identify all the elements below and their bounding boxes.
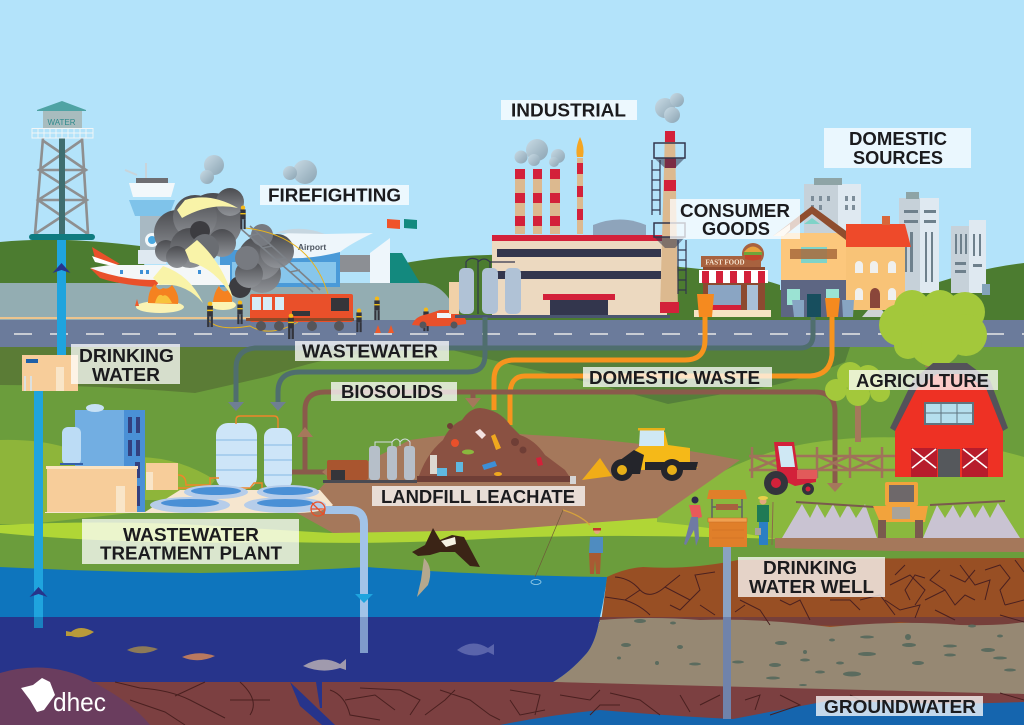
tower central pipe [59, 138, 65, 234]
upper pipe arrow [52, 263, 70, 273]
deep water [0, 617, 600, 682]
label: drinking water [71, 344, 180, 385]
lime band [0, 518, 800, 543]
process pipes [466, 258, 515, 314]
well [707, 490, 747, 719]
well pipe [723, 547, 731, 719]
sky smoke puffs [200, 155, 317, 184]
burning plane [90, 247, 230, 287]
factory roof tank [593, 220, 646, 235]
big chimney [652, 131, 686, 313]
plant platform [45, 490, 333, 513]
upper blue pipe [57, 240, 66, 356]
shop awning [699, 270, 768, 283]
outfall valve [311, 502, 325, 516]
plant annex [146, 463, 178, 490]
wastewater pipe long [236, 317, 813, 405]
road dashes [14, 333, 1024, 335]
wastewater arrows [228, 402, 286, 411]
factory [449, 93, 686, 318]
bald eagle with fish [412, 528, 480, 597]
label: consumer goods: GOODS [702, 218, 770, 239]
groundwater [500, 700, 1024, 725]
fire truck [246, 294, 354, 331]
tower name: WATER [48, 118, 76, 127]
water jets [153, 197, 238, 303]
soil dark strip [598, 617, 1024, 626]
tower roof [37, 101, 86, 111]
bin domestic [825, 298, 840, 317]
rock pebbles [617, 619, 1016, 686]
wastewater pipe short [278, 317, 485, 405]
firefighters [207, 206, 429, 339]
lower pipe arrow [30, 587, 48, 597]
gate annex [390, 253, 420, 283]
farmer [755, 496, 773, 545]
lower blue pipe [30, 391, 48, 628]
deep bedrock [0, 682, 1024, 725]
label: drinking water: WATER [92, 364, 160, 385]
label: drinking water well: DRINKING [763, 557, 857, 578]
label: domestic sources: DOMESTIC [849, 128, 947, 149]
soil cracks [115, 560, 1024, 725]
tower base [29, 234, 95, 240]
label: drinking water well: WATER WELL [749, 576, 874, 597]
fast food shop [694, 243, 771, 317]
soil layer brown [600, 558, 1024, 630]
factory smoke [514, 93, 684, 167]
label: drinking water: DRINKING [79, 345, 174, 366]
light green field right [657, 437, 1024, 540]
tower railing [32, 128, 93, 138]
shop step [694, 310, 771, 317]
landfill debris [430, 423, 543, 476]
tan rock layer [553, 618, 1024, 693]
label: agriculture: AGRICULTURE [856, 370, 989, 391]
shop sign [701, 256, 761, 267]
orange process pipe [178, 416, 278, 488]
dark green slope centre [440, 347, 850, 404]
label: landfill leachate: LANDFILL LEACHATE [381, 486, 575, 507]
label: drinking water well [738, 557, 885, 597]
house left [773, 206, 853, 317]
fire truck ladder [240, 226, 320, 292]
mid green land [0, 347, 1024, 587]
water tower [29, 101, 95, 240]
plant tower [75, 410, 125, 470]
tower tank [43, 111, 82, 129]
airport sign: Airport [298, 242, 326, 252]
sprayer mounds [782, 503, 1020, 538]
well base [709, 518, 747, 547]
road [0, 320, 1024, 347]
lime patch left [0, 440, 140, 524]
label: domestic sources: SOURCES [853, 147, 943, 168]
dhec apple icon [21, 678, 55, 712]
dhec wordmark: dhec [53, 687, 106, 717]
lime patch behind plant [140, 457, 215, 500]
sprayer boom [796, 501, 1005, 507]
woman at well [684, 496, 702, 546]
landfill brown ground [297, 433, 740, 533]
label: industrial: INDUSTRIAL [511, 100, 626, 120]
terminal building [220, 219, 420, 287]
red car [412, 310, 466, 328]
factory body [492, 235, 667, 316]
landfill mound [417, 408, 573, 482]
label: groundwater: GROUNDWATER [824, 696, 976, 717]
tractor [764, 442, 817, 495]
drinking water box [22, 355, 78, 391]
outfall pipe [311, 502, 373, 653]
shop window [708, 285, 741, 306]
aquifer fissure [290, 682, 335, 725]
factory door [543, 294, 615, 300]
consumer waste pipe [494, 317, 705, 410]
wheel loader [570, 428, 698, 484]
smoke clouds [154, 188, 294, 298]
clarifiers [150, 485, 326, 513]
plant main building [47, 468, 137, 512]
terminal gate [370, 238, 390, 283]
tall city buildings [804, 178, 990, 295]
large tree [879, 290, 987, 367]
tan rock layer lower [553, 660, 1024, 694]
label: wastewater treatment plant: WASTEWATER [123, 524, 259, 545]
back hills [0, 240, 1024, 300]
fisherman [531, 510, 603, 584]
barn [890, 363, 1008, 477]
label: wastewater treatment plant [82, 519, 299, 564]
tan shed [449, 282, 459, 314]
traffic cones [135, 299, 394, 333]
label: domestic sources [824, 128, 971, 168]
domestic waste pipe [510, 317, 832, 425]
wastewater plant buildings [45, 404, 333, 513]
flags [387, 219, 400, 229]
runway edge line [0, 317, 255, 319]
outfall arrow [355, 594, 373, 603]
trash cans [792, 300, 854, 317]
label: wastewater: WASTEWATER [302, 340, 438, 362]
label: consumer goods: CONSUMER [680, 200, 790, 221]
biosolids pipe [292, 392, 835, 488]
fire hose [207, 228, 328, 331]
tower legs [35, 138, 88, 234]
fast food shop: FAST FOOD [705, 258, 745, 266]
biosolids arrows [297, 398, 843, 492]
small tree [825, 362, 890, 442]
process tanks [459, 268, 521, 314]
leachate treatment unit [323, 439, 417, 483]
factory curb [455, 315, 670, 318]
sprayer vehicle [873, 482, 928, 538]
plant small tank [62, 427, 81, 465]
well roof [707, 490, 747, 499]
sky [0, 0, 1024, 290]
bedrock band right [553, 682, 1024, 725]
brown field strip [775, 538, 1024, 552]
house right [846, 216, 911, 317]
water lake [0, 567, 607, 682]
fire flames [136, 284, 236, 313]
burger sign [742, 243, 764, 265]
airport tower [125, 163, 175, 264]
jet bridge [340, 255, 376, 272]
dhec logo [0, 668, 150, 725]
flare stack [576, 137, 584, 234]
bin consumer [697, 294, 714, 317]
label: consumer goods [670, 199, 800, 239]
fish [66, 628, 494, 671]
well posts [712, 499, 742, 518]
label: wastewater treatment plant: TREATMENT PLANT [100, 542, 283, 564]
label: biosolids: BIOSOLIDS [341, 381, 443, 402]
runway apron [0, 283, 450, 320]
label: firefighting: FIREFIGHTING [268, 184, 401, 206]
factory chimneys [515, 169, 560, 234]
ground base [0, 290, 1024, 350]
fence [749, 447, 895, 478]
label: domestic waste: DOMESTIC WASTE [589, 367, 760, 388]
dark green slope left [0, 347, 440, 393]
digester tanks [216, 423, 257, 489]
